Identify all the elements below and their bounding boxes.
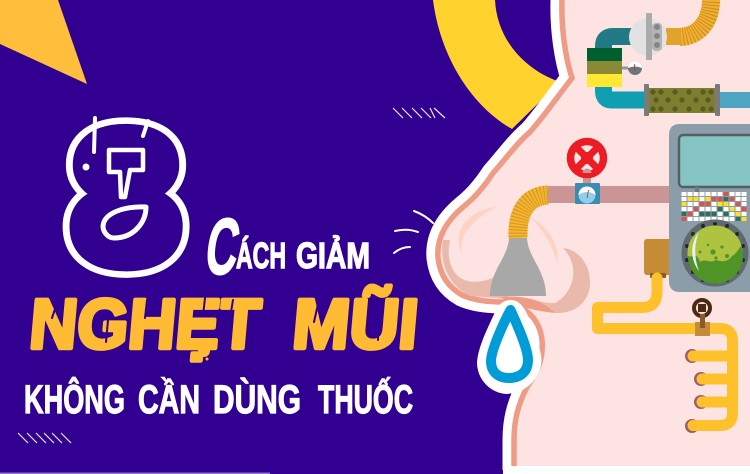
pipe gauge — [575, 183, 600, 204]
machine stem — [695, 187, 699, 195]
big number 8: 8 — [70, 92, 182, 304]
heading: Cách Giảm — [200, 202, 370, 292]
heading: Nghẹt Mũi: MŨI — [290, 285, 422, 363]
face white outline — [438, 0, 572, 470]
sphere tank — [629, 13, 667, 60]
breath spark lines — [394, 211, 433, 253]
face profile — [438, 0, 750, 474]
ink drips on heading — [52, 298, 378, 342]
tear drop — [480, 303, 538, 391]
heading: Cách Giảm: GIẢM — [296, 235, 370, 276]
olive filter — [644, 84, 720, 116]
gray funnel — [490, 238, 546, 296]
corrugated hose — [518, 195, 548, 238]
control machine — [669, 124, 750, 292]
subtitle: Không cần dùng thuốc: KHÔNG — [24, 376, 125, 422]
yellow ink splat — [194, 345, 210, 362]
pink pipe — [548, 186, 670, 203]
nostril shading — [442, 206, 590, 313]
subtitle: Không cần dùng thuốc: DÙNG — [213, 376, 301, 422]
porthole with green liquid — [682, 220, 748, 286]
orange connector — [666, 28, 681, 45]
face salmon line — [438, 0, 572, 466]
hatch marks bottom — [18, 433, 71, 443]
big number 8: 8 — [70, 92, 182, 304]
yellow coil pipe — [598, 278, 732, 433]
brown junction box — [644, 239, 674, 278]
face pink fill — [438, 0, 750, 466]
blue outlet pipe — [720, 92, 750, 108]
subtitle: Không cần dùng thuốc: CẦN — [138, 376, 200, 422]
subtitle: Không cần dùng thuốc — [24, 376, 413, 422]
top hose — [680, 0, 711, 37]
heading: Cách Giảm: ÁCH — [236, 235, 286, 276]
brown valve — [694, 300, 710, 336]
dark teal elbow pipe — [604, 36, 632, 52]
hatch marks top — [393, 108, 445, 118]
red valve wheel — [570, 142, 604, 186]
heading: Nghẹt Mũi: NGHẸT — [27, 285, 264, 363]
machine screen — [679, 135, 750, 187]
teal lower pipe — [604, 85, 645, 100]
small gauge — [622, 61, 642, 75]
yellow corner triangle — [0, 0, 87, 84]
yellow crescent behind face — [433, 0, 560, 129]
layered tank — [587, 48, 622, 87]
bottom white strip — [503, 466, 750, 474]
heading: Cách Giảm: C — [200, 202, 245, 292]
subtitle: Không cần dùng thuốc: THUỐC — [318, 376, 413, 422]
keypad — [682, 192, 746, 221]
heading: Nghẹt Mũi — [27, 285, 422, 363]
